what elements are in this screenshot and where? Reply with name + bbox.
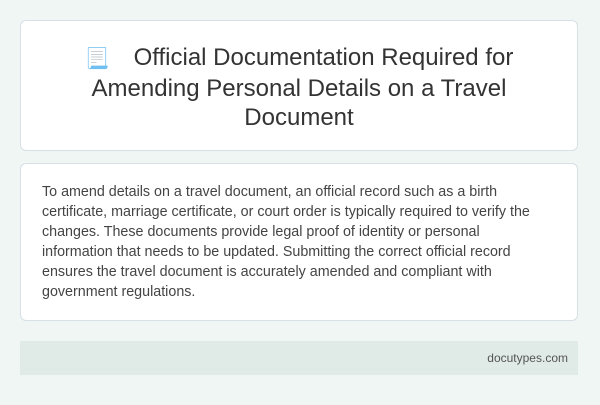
panel: description xyxy=(20,163,578,321)
panel: title xyxy=(20,20,578,151)
footer xyxy=(20,341,578,375)
footer text: docutypes.com xyxy=(487,351,568,365)
title: 📃 Official Documentation Required for Amending Personal Details on a Travel Document xyxy=(85,44,513,131)
text block: To amend details on a travel document, an official record such as a birth certificate, marriage certificate, or court order is typically required to verify the changes. These documents provide legal proof of identity or personal information that needs to be updated. Submitting the correct official record ensures the travel document is accurately amended and compliant with government regulations. xyxy=(42,184,530,300)
